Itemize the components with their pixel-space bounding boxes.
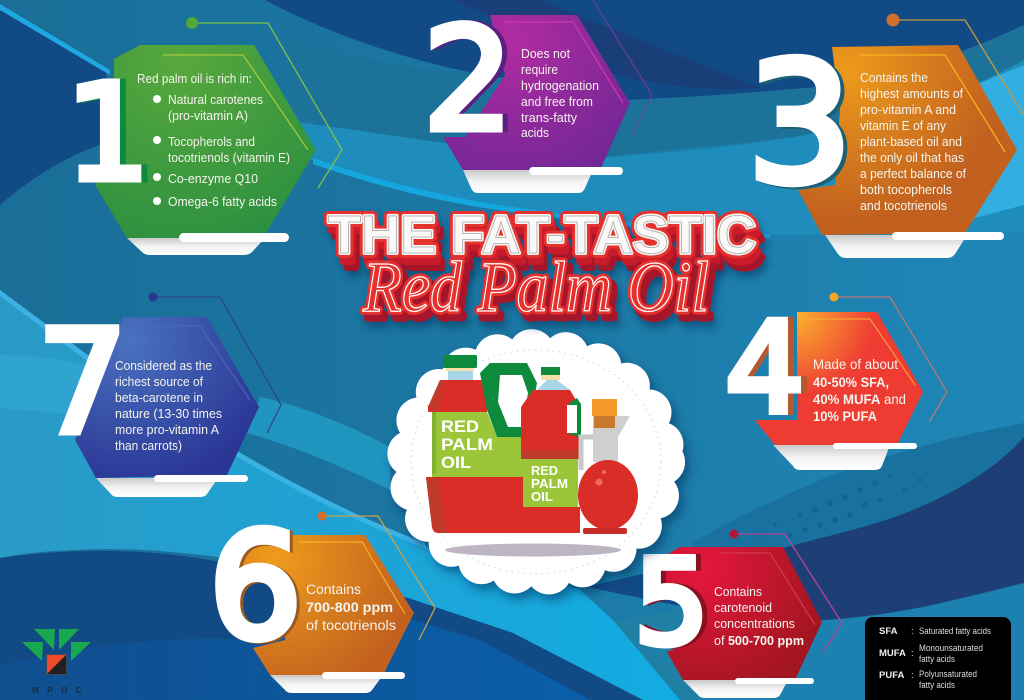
plate 2 [463,170,593,193]
inner line 4 [808,319,915,385]
text 2: and free from [521,95,593,109]
pill 3 [892,232,1004,240]
pill 5 [735,678,814,684]
logo: MPOC: MPOC [32,686,90,695]
title line 2: Red Palm Oil [362,247,709,327]
hexagon 6 [237,535,414,675]
text 3: Contains the [860,71,928,85]
text 7: than carrots) [115,439,182,453]
text 3: and tocotrienols [860,199,947,213]
text 7: Considered as the [115,359,212,373]
numeral 5: 5 [639,534,714,672]
inner line 5 [720,553,815,625]
inner line 7 [127,326,250,400]
text 1: Red palm oil is rich in: [137,72,252,86]
panel 4: red-orange hexagon [725,296,923,470]
numeral 6: 6 [212,503,305,673]
text 5: Contains [714,585,762,599]
text 5: of 500-700 ppm [714,634,804,648]
SFA row: : [911,626,914,637]
text 6 [306,582,396,633]
MUFA row: : [911,648,914,659]
title line 1: THE FAT-TASTIC [328,205,756,265]
text 4: Made of about [813,357,898,372]
dotted ring [411,350,661,574]
inner line 6 [298,542,405,614]
medium bottle [521,367,581,533]
PUFA row [879,669,977,690]
text 3: both tocopherols [860,183,952,197]
text 6: Contains [306,582,361,597]
MUFA row: fatty acids [919,654,955,664]
text 2: hydrogenation [521,79,599,93]
text 1: tocotrienols (vitamin E) [168,151,290,165]
text 1: Omega-6 fatty acids [168,195,277,209]
MUFA row: Monounsaturated [919,643,983,653]
inner line 1 [163,55,308,150]
panel 5: crimson hexagon [634,534,822,698]
text 3: vitamin E of any [860,119,947,133]
label medium [531,463,568,504]
pill 7 [154,475,248,482]
label medium: RED [531,463,558,478]
text 7: beta-carotene in [115,391,203,405]
hexagon 2 [443,15,630,170]
text 4: 10% PUFA [813,409,877,424]
panel 1: green hexagon [66,45,316,255]
text 2: Does not [521,47,571,61]
text 7 [115,359,222,453]
inner line 2 [503,22,623,103]
text 6: of tocotrienols [306,618,396,633]
numeral 6: 6 [209,502,302,672]
text 1: Natural carotenes [168,93,263,107]
shadow under bottles [445,544,621,556]
label large [441,417,493,472]
connector lines [153,0,1024,652]
plate 3 [825,235,967,258]
hexagon 4 [755,312,923,445]
decorative dot pattern [758,474,922,538]
numeral 3: 3 [747,28,853,221]
title line 1: THE FAT-TASTIC [335,219,763,279]
panel 2: purple hexagon [423,0,630,193]
text 5 [714,585,804,648]
label medium: PALM [531,476,568,491]
title line 1: THE FAT-TASTIC [331,213,759,273]
panel 7: blue hexagon [37,299,259,497]
plate 6 [270,675,383,693]
numeral 1: 1 [72,57,156,211]
text 5: concentrations [714,617,795,631]
numeral 4: 4 [725,296,805,442]
numeral 2: 2 [428,0,518,163]
connector dots [148,14,900,538]
text 2 [521,47,599,140]
plate 4 [773,445,890,470]
text 1 [137,72,290,209]
numeral 7: 7 [37,299,128,466]
text 1: Tocopherols and [168,135,255,149]
text 4 [813,357,906,424]
title line 1: THE FAT-TASTIC [328,205,756,265]
PUFA row: PUFA [879,670,904,681]
text 3: a perfect balance of [860,167,967,181]
PUFA row: fatty acids [919,680,955,690]
pill 1 [179,233,289,242]
numeral 4: 4 [731,296,811,442]
large jug [426,355,537,533]
text 7: nature (13-30 times [115,407,222,421]
numeral 3: 3 [751,30,857,223]
hexagon 3 [798,45,1017,235]
numeral 2: 2 [423,0,513,163]
text 4: 40-50% SFA, [813,375,889,390]
text 1: (pro-vitamin A) [168,109,248,123]
pill 4 [833,443,917,449]
text 7: richest source of [115,375,203,389]
hexagon 1 [95,45,316,238]
text 3: pro-vitamin A and [860,103,956,117]
label large: RED [441,417,479,436]
label medium: OIL [531,489,553,504]
label large: PALM [441,435,493,454]
plate 7 [96,478,218,497]
panel 6: orange hexagon [209,502,414,693]
text 6: 700-800 ppm [306,600,393,615]
inner line 3 [859,55,1005,152]
title [328,205,763,333]
title line 1: THE FAT-TASTIC [328,205,756,265]
text 5: carotenoid [714,601,772,615]
text 3 [860,71,967,213]
text 2: acids [521,126,549,140]
hexagon 5 [663,547,822,680]
text 1: Co-enzyme Q10 [168,172,258,186]
plate 5 [683,680,788,698]
SFA row [879,626,991,637]
label large: OIL [441,453,471,472]
title line 2: Red Palm Oil [367,253,714,333]
text 4: 40% MUFA and [813,392,906,407]
text 3: plant-based oil and [860,135,962,149]
MUFA row: MUFA [879,648,906,659]
legend box [865,617,1011,700]
PUFA row: Polyunsaturated [919,669,977,679]
pill 2 [529,167,623,175]
PUFA row: : [911,670,914,681]
title line 2: Red Palm Oil [362,247,709,327]
plate 1 [127,238,265,255]
SFA row: Saturated fatty acids [919,626,991,636]
numeral 1: 1 [66,57,150,211]
text 2: trans-fatty [521,111,578,125]
numeral 5: 5 [634,534,709,672]
text 3: the only oil that has [860,151,964,165]
SFA row: SFA [879,626,898,637]
panel 3: orange hexagon [747,28,1017,258]
pill 6 [322,672,405,679]
cruet [578,399,638,534]
illustration: oil containers [426,355,638,556]
hexagon 7 [75,317,259,478]
text 2: require [521,63,558,77]
scalloped badge [410,352,662,572]
logo: MPOC [22,629,91,695]
text 7: more pro-vitamin A [115,423,220,437]
MUFA row [879,643,983,664]
text 3: highest amounts of [860,87,964,101]
